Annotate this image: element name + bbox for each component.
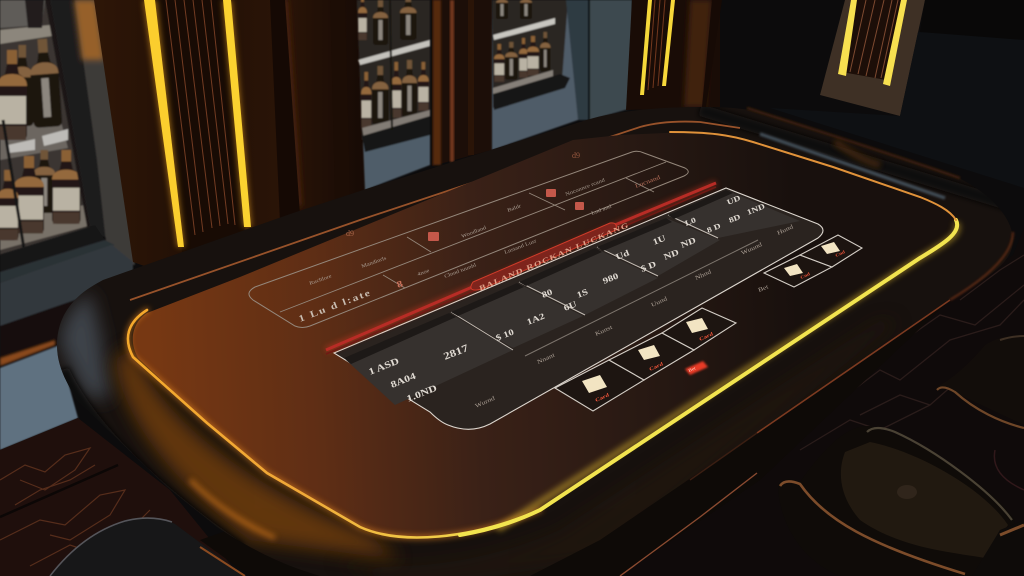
card header bands	[344, 190, 733, 364]
upper panel text: Lucnand	[634, 174, 662, 190]
bottom row captions: Nnant	[536, 352, 556, 366]
card numerals: Ud	[615, 248, 631, 262]
lower betting panel	[334, 188, 823, 429]
upper panel text: Clnnd tuunhl	[444, 263, 477, 280]
box 1	[555, 360, 644, 411]
bottom row captions: Wurnd	[474, 395, 496, 410]
box 1: Card	[595, 392, 611, 404]
red indicator	[685, 361, 708, 375]
rim logo marks	[346, 151, 580, 238]
red header band	[326, 183, 716, 354]
box 2: Card	[649, 361, 665, 373]
upper panel text: 4noe	[417, 268, 431, 278]
box 3: Card	[699, 331, 715, 343]
central column	[432, 0, 492, 166]
case frame and lower cabinet	[0, 0, 135, 450]
card numerals: 8 D	[706, 221, 722, 235]
box 5: Cnd	[835, 250, 846, 259]
card numerals: 1 ASD	[367, 356, 401, 377]
bottom row captions: Nhnd	[694, 269, 713, 282]
table rim	[57, 107, 1013, 576]
upper panel text: 8	[396, 279, 404, 290]
glowing light strip	[128, 132, 957, 537]
card numerals: L0	[684, 215, 698, 228]
box 2	[609, 333, 694, 380]
bottom row captions: Uund	[650, 296, 669, 309]
right column with yellow light strips	[626, 0, 722, 110]
card numerals: $ D	[640, 260, 658, 274]
card numerals: $ 10	[495, 327, 516, 343]
left column with yellow light strips	[94, 0, 366, 268]
felt playing surface	[133, 132, 957, 537]
card dividers	[451, 215, 718, 350]
red indicator: Bet	[688, 366, 697, 374]
upper panel icons	[428, 189, 584, 241]
upper panel text: 1 Lu d l:ate	[298, 288, 373, 324]
left carpet	[0, 418, 240, 576]
upper panel text: Lnstand Lusr	[504, 239, 537, 256]
card numerals: 80	[541, 287, 554, 300]
bottom row captions: Hund	[776, 224, 795, 237]
rim logo marks: d9	[346, 229, 354, 238]
card numerals: ND	[663, 248, 680, 262]
upper panel text: Woodland	[461, 225, 487, 240]
chair: right rear	[935, 335, 1024, 490]
card numerals: 8D	[728, 212, 742, 225]
small caption: Bet	[757, 284, 769, 294]
box 5	[800, 235, 862, 267]
upper panel text: Nnconnce rcand	[565, 178, 606, 198]
card numerals: 2817	[442, 342, 470, 362]
card numerals: 980	[602, 271, 620, 286]
card numerals: 6U	[563, 300, 578, 313]
rim logo marks: d9	[572, 151, 580, 160]
bottom row captions: Kunst	[594, 324, 613, 338]
bottom row captions	[474, 224, 795, 410]
upper panel text: Baldr	[507, 204, 522, 214]
card numerals: 8A04	[389, 371, 418, 390]
upper panel text: Lnd and	[591, 204, 613, 217]
right carpet	[620, 228, 1024, 576]
card numerals: 1S	[576, 287, 589, 300]
score cards	[346, 190, 800, 405]
box 4	[764, 255, 832, 287]
upper panel text: Ruchlore	[309, 274, 333, 287]
card numerals: 1U	[652, 234, 667, 247]
chair: left front	[50, 517, 245, 576]
box 4: Cnd	[800, 272, 811, 281]
display case with bottles	[0, 0, 95, 255]
table rim copper line and blue highlight	[130, 122, 945, 300]
card numerals: UD	[726, 193, 742, 207]
card numerals: 1ND	[746, 201, 766, 217]
red header band: BALAND ROCKAN LUCKANG	[478, 220, 630, 293]
table underside	[200, 300, 950, 576]
dark right wall	[770, 0, 1024, 188]
chair: right front	[778, 426, 1024, 576]
middle window with bottles	[357, 0, 430, 190]
row divider	[525, 240, 758, 356]
box 3	[662, 308, 736, 350]
card numerals: 1.0ND	[405, 383, 439, 404]
card numerals: ND	[680, 236, 697, 250]
card numerals	[367, 193, 766, 404]
betting boxes	[555, 235, 862, 411]
wall panel with yellow strips	[820, 0, 925, 116]
upper betting panel	[249, 151, 688, 328]
card numerals: 1A2	[526, 311, 546, 327]
right window with bottles	[492, 0, 632, 150]
upper panel text	[298, 174, 662, 324]
bottom row captions: Wuund	[740, 242, 763, 257]
upper panel text: Mandinrls	[361, 256, 388, 270]
